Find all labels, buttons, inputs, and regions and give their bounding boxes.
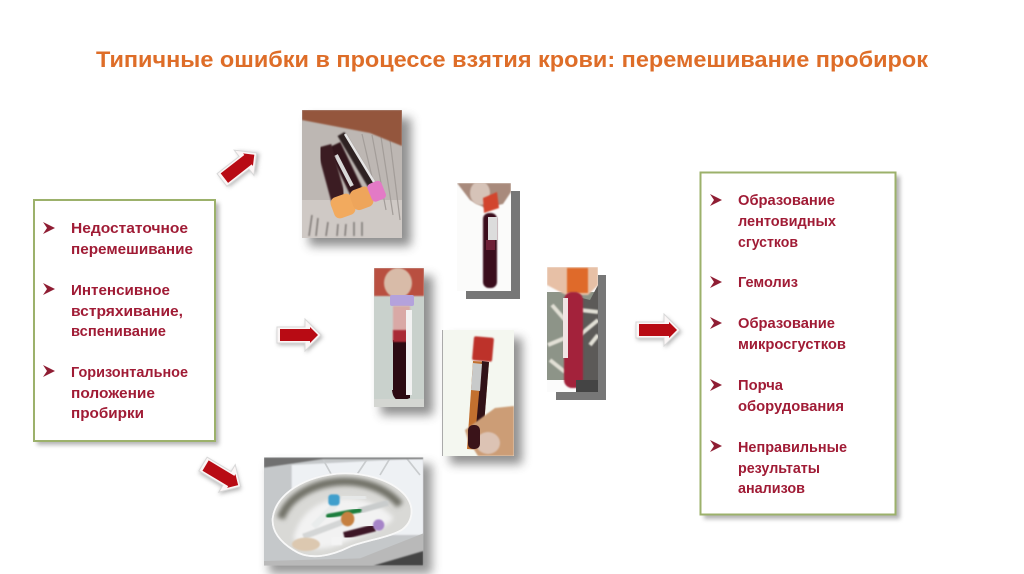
arrow: to consequences panel [636,314,682,348]
photo: three tubes on paper [302,110,411,246]
bullet: equipment damage [710,378,844,415]
arrow: down-right to tray photo [194,450,251,503]
title: Типичные ошибки в процессе взятия крови: перемешивание пробирок [96,47,929,72]
bullet: wrong results [710,440,847,497]
bullet: microclots: Образование [738,316,835,332]
photo: tube with red cap and separated serum, bottom [442,330,522,464]
photo: tube held by the cap, top [457,181,520,299]
bullet: equipment damage: оборудования [738,399,844,415]
bullet: equipment damage: Порча [738,378,784,394]
bullet: horizontal position: положение [71,386,155,402]
panel: causes [34,200,219,445]
bullet: hemolysis: Гемолиз [738,275,798,291]
bullet: horizontal position: Горизонтальное [71,365,188,381]
bullet: microclots: микросгустков [738,337,846,353]
bullet: ribbon clots: Образование [738,193,835,209]
bullet: insufficient mixing: Недостаточное [71,221,188,237]
arrow: up-right to photo of tubes [212,139,269,194]
bullet: insufficient mixing: перемешивание [71,242,193,258]
bullet: horizontal position: пробирки [71,406,144,422]
bullet: insufficient mixing [43,221,193,258]
arrow: center to tube photos [277,319,323,353]
bullet: hemolysis [710,275,798,291]
bullet: wrong results: результаты [738,461,820,477]
photo: tube over used needles, right [547,267,606,400]
bullet: horizontal position [43,365,188,422]
bullet: ribbon clots [710,193,836,251]
photo: kidney dish with tubes [264,457,432,574]
bullet: intensive shaking: вспенивание [71,324,166,340]
bullet: intensive shaking: встряхивание, [71,304,183,320]
panel: consequences [700,172,900,519]
bullet: microclots [710,316,846,353]
bullet: ribbon clots: лентовидных [738,214,836,230]
bullet: wrong results: Неправильные [738,440,847,456]
bullet: intensive shaking [43,283,183,340]
bullet: wrong results: анализов [738,481,805,497]
bullet: ribbon clots: сгустков [738,235,798,251]
bullet: intensive shaking: Интенсивное [71,283,170,299]
photo: tube with lilac cap, left [374,268,433,415]
